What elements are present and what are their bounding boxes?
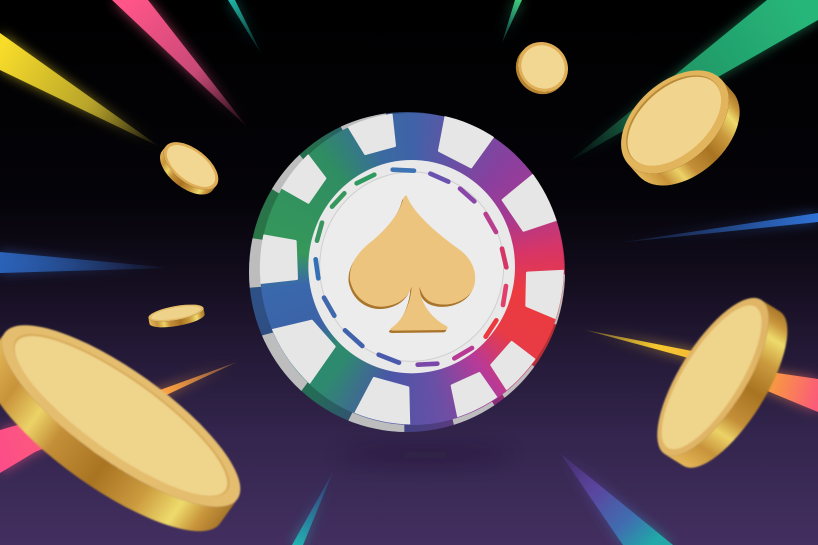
center disc	[308, 160, 515, 373]
coin: lower right blurred	[637, 282, 808, 483]
white blocks	[260, 114, 564, 424]
ray: pink and orange lower left	[0, 362, 237, 473]
chip edge	[249, 112, 565, 432]
ray: blue left	[0, 252, 173, 273]
coin: lower left large blurred	[0, 296, 264, 545]
center disc inner line	[320, 172, 504, 361]
coin: tiny left	[147, 301, 206, 331]
ray: yellow	[0, 33, 160, 147]
ray: pink top	[112, 0, 248, 128]
ray: teal top	[228, 0, 263, 57]
dashed ring	[316, 170, 506, 365]
ray: purple bottom	[560, 453, 673, 545]
coin: left small	[152, 133, 227, 204]
block edges	[249, 113, 565, 432]
ray: green large	[567, 0, 818, 163]
ray: green small	[502, 0, 522, 43]
chip face	[260, 112, 564, 424]
poker chip	[249, 112, 565, 432]
ray: blue right	[617, 213, 818, 243]
ray: orange right	[585, 330, 818, 412]
ray: teal bottom	[292, 472, 333, 545]
coin: top right large	[601, 50, 759, 206]
chip shadow	[340, 448, 510, 462]
spade	[349, 196, 475, 333]
coin: top small	[506, 32, 578, 104]
